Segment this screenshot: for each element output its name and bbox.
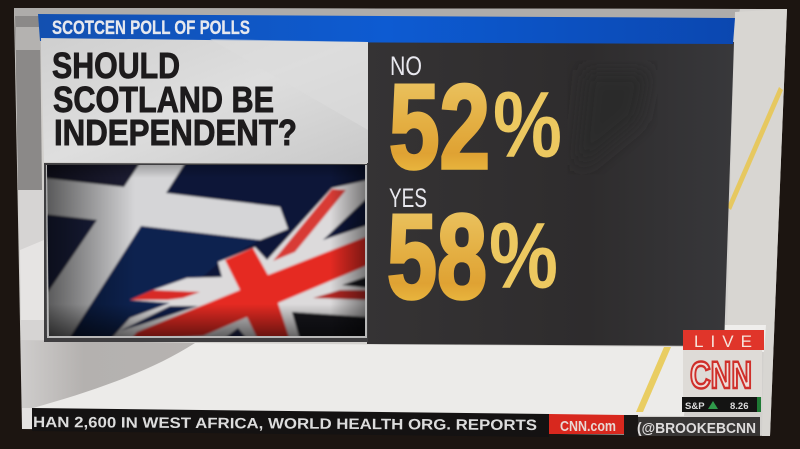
CNN logo: CNN	[690, 355, 752, 397]
result: Yes 58%: 58	[387, 190, 487, 324]
market ticker	[682, 397, 761, 412]
dark results panel	[367, 40, 734, 346]
icon: saltire left blue	[66, 219, 92, 260]
news ticker: HAN 2,600 IN WEST AFRICA, WORLD HEALTH ORG. REPORTS	[33, 414, 537, 434]
result: No 52%: %	[493, 72, 562, 177]
icon: union jack bottom triangle	[203, 315, 260, 340]
live badge: LIVE	[694, 332, 752, 351]
live badge	[683, 330, 764, 351]
question panel: INDEPENDENT?	[54, 112, 297, 153]
result: Yes 58%: YES	[389, 183, 427, 213]
header bar: poll title: SCOTCEN POLL OF POLLS	[52, 18, 250, 39]
icon: union jack red cross	[130, 236, 368, 340]
news ticker	[32, 408, 549, 437]
result: No 52%: 52	[389, 60, 490, 194]
question panel: SHOULD	[52, 45, 180, 86]
flag image: Saltire and Union Jack	[44, 160, 369, 342]
icon: union jack red saltire arms	[273, 189, 346, 261]
result: Yes 58%: %	[489, 203, 558, 308]
icon: union jack lower-left blue	[120, 306, 198, 331]
CNN.com tag	[549, 414, 624, 435]
CNN.com tag: CNN.com	[560, 419, 616, 435]
icon: saltire upper-left blue	[65, 165, 136, 184]
header bar: poll title	[38, 14, 735, 44]
question panel: SCOTLAND BE	[53, 79, 274, 120]
social handle	[624, 415, 760, 437]
result: No 52%: NO	[390, 51, 422, 81]
icon: saltire white cross	[44, 160, 288, 340]
icon: saltire lower blue	[68, 226, 260, 340]
social handle: (@BROOKEBCNN	[637, 421, 756, 437]
question panel	[41, 38, 368, 163]
icon: union jack dark lower-right	[294, 312, 365, 336]
market ticker: S&P	[685, 401, 705, 412]
market ticker: 8.26	[730, 401, 748, 412]
icon: union jack white field	[110, 180, 368, 340]
